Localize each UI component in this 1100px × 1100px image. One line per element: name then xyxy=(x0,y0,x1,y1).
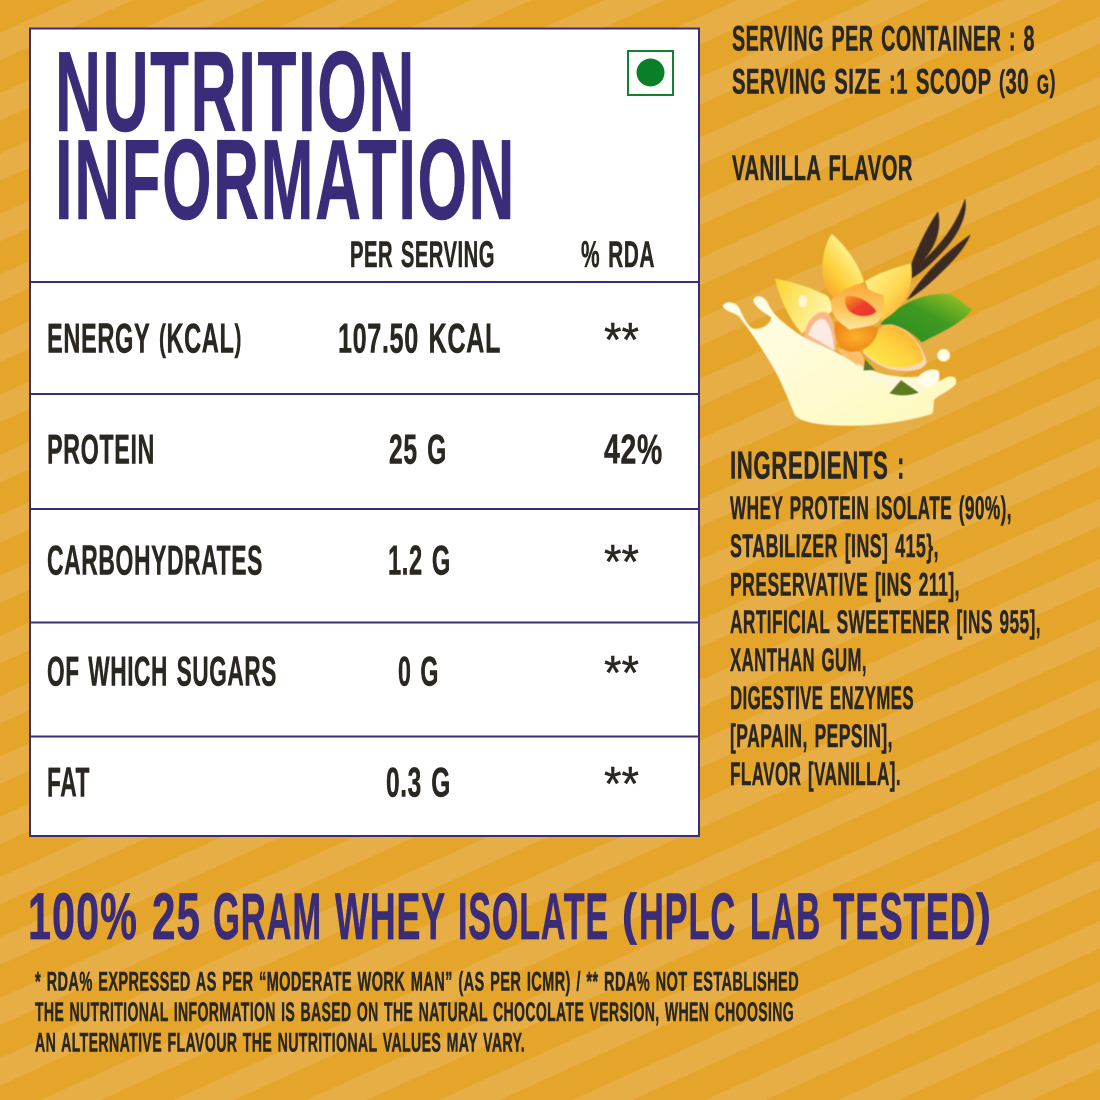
title: nutrition information xyxy=(55,29,516,244)
ingredients list: XANTHAN GUM, xyxy=(730,642,867,678)
ingredients xyxy=(730,444,1041,792)
row: carbohydrates: ** xyxy=(604,536,639,589)
vanilla pods xyxy=(907,198,971,301)
headline: whey isolate claim: ) xyxy=(976,882,992,945)
headline: whey isolate claim: 25 xyxy=(152,879,201,953)
row: fat: ** xyxy=(604,758,639,811)
headline: whey isolate claim: LAB xyxy=(750,879,821,953)
serving information: ) xyxy=(1050,64,1056,98)
footnotes: AN ALTERNATIVE FLAVOUR THE NUTRITIONAL VALUES MAY VARY. xyxy=(35,1028,525,1058)
flavor label: VANILLA FLAVOR xyxy=(732,149,913,188)
row: carbohydrates: 1.2 G xyxy=(388,536,451,584)
row: carbohydrates: CARBOHYDRATES xyxy=(47,536,263,584)
flower centre and front petal xyxy=(831,284,927,371)
ingredients list: STABILIZER [INS] 415}, xyxy=(730,528,939,564)
serving information: G xyxy=(1037,70,1050,100)
row: protein: 25 G xyxy=(389,426,447,472)
row: energy xyxy=(47,314,639,367)
row: protein: 42% xyxy=(604,426,663,472)
panel: nutrition table xyxy=(30,28,699,836)
ingredients list: DIGESTIVE ENZYMES xyxy=(730,680,914,716)
row: energy: ** xyxy=(604,314,639,367)
footnotes xyxy=(35,966,799,1058)
title: nutrition information: NUTRITION xyxy=(55,29,416,156)
headline: whey isolate claim: 100% xyxy=(28,879,138,953)
row: carbohydrates xyxy=(47,536,639,589)
headline: whey isolate claim: HPLC xyxy=(639,879,736,953)
row: of which sugars: 0 G xyxy=(398,648,439,694)
headline: whey isolate claim: WHEY xyxy=(335,879,446,953)
row: energy: 107.50 KCAL xyxy=(338,314,501,362)
cream behind splash xyxy=(857,363,939,395)
icon: vegetarian mark xyxy=(628,51,673,95)
row: energy: ENERGY xyxy=(47,314,230,362)
ingredients list xyxy=(730,490,1041,792)
table header: PER SERVING xyxy=(350,234,495,275)
row: energy: ) xyxy=(234,318,242,358)
row: energy: KCAL xyxy=(166,314,234,362)
row: fat: 0.3 G xyxy=(386,758,451,806)
illustration: vanilla flower in milk splash xyxy=(723,198,972,426)
serving information xyxy=(732,20,1056,102)
petals behind milk xyxy=(775,234,912,371)
headline: whey isolate claim xyxy=(28,879,992,953)
headline: whey isolate claim: ( xyxy=(622,882,638,945)
headline: whey isolate claim: GRAM xyxy=(213,879,322,953)
ingredients heading: INGREDIENTS : xyxy=(730,444,905,488)
serving information: 30 xyxy=(1005,62,1037,102)
row: energy: ( xyxy=(159,318,166,358)
ingredients list: FLAVOR [VANILLA]. xyxy=(730,756,901,792)
headline: whey isolate claim: TESTED xyxy=(833,879,976,953)
ingredients list: [PAPAIN, PEPSIN], xyxy=(730,718,893,754)
leaf xyxy=(880,294,972,342)
title: nutrition information: INFORMATION xyxy=(55,117,516,244)
row: of which sugars: OF WHICH SUGARS xyxy=(47,648,277,694)
row: protein xyxy=(47,426,663,472)
serving information: ( xyxy=(999,64,1005,98)
headline: whey isolate claim: ISOLATE xyxy=(458,879,609,953)
table header: % RDA xyxy=(581,234,655,275)
milk splash xyxy=(723,296,956,426)
row: fat: FAT xyxy=(47,758,90,806)
row: protein: PROTEIN xyxy=(47,426,155,472)
row: of which sugars xyxy=(47,647,639,700)
row: of which sugars: ** xyxy=(604,647,639,700)
row: fat xyxy=(47,758,639,811)
